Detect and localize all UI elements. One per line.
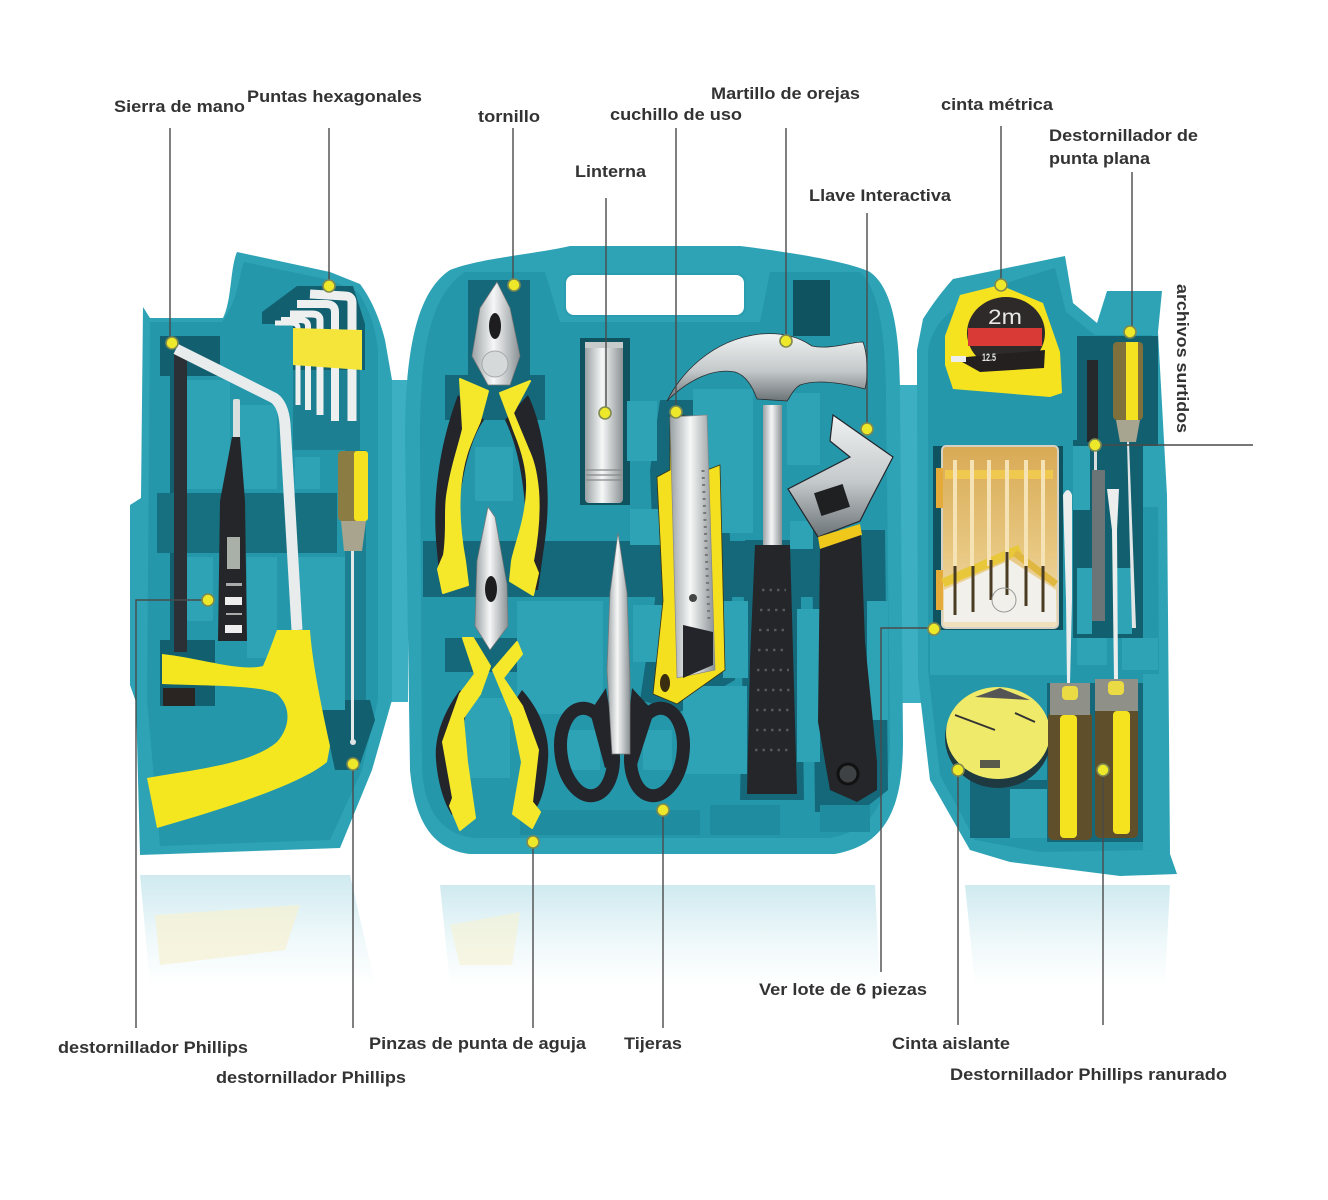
tool: flashlight — [585, 342, 623, 503]
raised blocks — [465, 389, 888, 778]
label: Destornillador de punta plana — [1049, 126, 1198, 168]
label: cinta métrica: cinta métrica — [941, 95, 1054, 114]
hinges — [386, 380, 922, 703]
label: Martillo de orejas: Martillo de orejas — [711, 84, 860, 103]
label: Sierra de mano: Sierra de mano — [114, 97, 245, 116]
tool: small screwdriver — [338, 451, 368, 745]
recesses — [160, 336, 220, 660]
label: destornillador Phillips (second): destornillador Phillips — [216, 1068, 406, 1087]
tool: hacksaw — [147, 349, 330, 828]
callout dots — [166, 279, 1136, 848]
case handle opening — [565, 274, 745, 316]
label: Tijeras: Tijeras — [624, 1034, 682, 1053]
panel: center case half — [405, 246, 903, 854]
raised blocks — [187, 380, 345, 710]
tool: adjustable wrench — [788, 415, 893, 802]
label: Destornillador de punta plana: Destornillador de — [1049, 126, 1198, 145]
tool: claw hammer — [667, 334, 867, 794]
tool: scissors — [555, 533, 689, 799]
panel: right case half — [917, 256, 1177, 876]
tool: voltage tester — [218, 399, 247, 641]
tool: tape measure — [945, 285, 1062, 397]
case reflection — [140, 875, 1170, 985]
tool: insulating tape — [945, 687, 1051, 788]
tool: combination pliers — [435, 282, 548, 595]
label: Destornillador de punta plana: punta plana — [1049, 149, 1151, 168]
tool: six-piece precision screwdriver set — [936, 446, 1058, 628]
label: Pinzas de punta de aguja: Pinzas de punta de aguja — [369, 1034, 587, 1053]
recesses — [1073, 336, 1158, 638]
recesses — [423, 541, 883, 597]
tool: hex keys — [275, 294, 362, 421]
tool: utility knife — [653, 415, 725, 704]
label: cuchillo de uso: cuchillo de uso — [610, 105, 742, 124]
label: Llave Interactiva: Llave Interactiva — [809, 186, 952, 205]
label: tornillo: tornillo — [478, 107, 540, 126]
label: Destornillador Phillips ranurado: Destornillador Phillips ranurado — [950, 1065, 1227, 1084]
leader lines — [136, 126, 1253, 1028]
label: Puntas hexagonales: Puntas hexagonales — [247, 87, 422, 106]
label: Cinta aislante: Cinta aislante — [892, 1034, 1010, 1053]
label: destornillador Phillips (left): destornillador Phillips — [58, 1038, 248, 1057]
label: Linterna: Linterna — [575, 162, 647, 181]
tool: needle nose pliers — [436, 507, 548, 830]
tool: tape measure: 12.5 — [982, 352, 996, 364]
label: Ver lote de 6 piezas: Ver lote de 6 piezas — [759, 980, 927, 999]
tool: assorted files and right screwdrivers — [1048, 342, 1143, 840]
panel: left case half — [130, 252, 392, 855]
label: archivos surtidos: archivos surtidos — [1173, 284, 1192, 433]
tool: tape measure: 2m — [988, 306, 1022, 329]
raised blocks — [930, 446, 1163, 850]
